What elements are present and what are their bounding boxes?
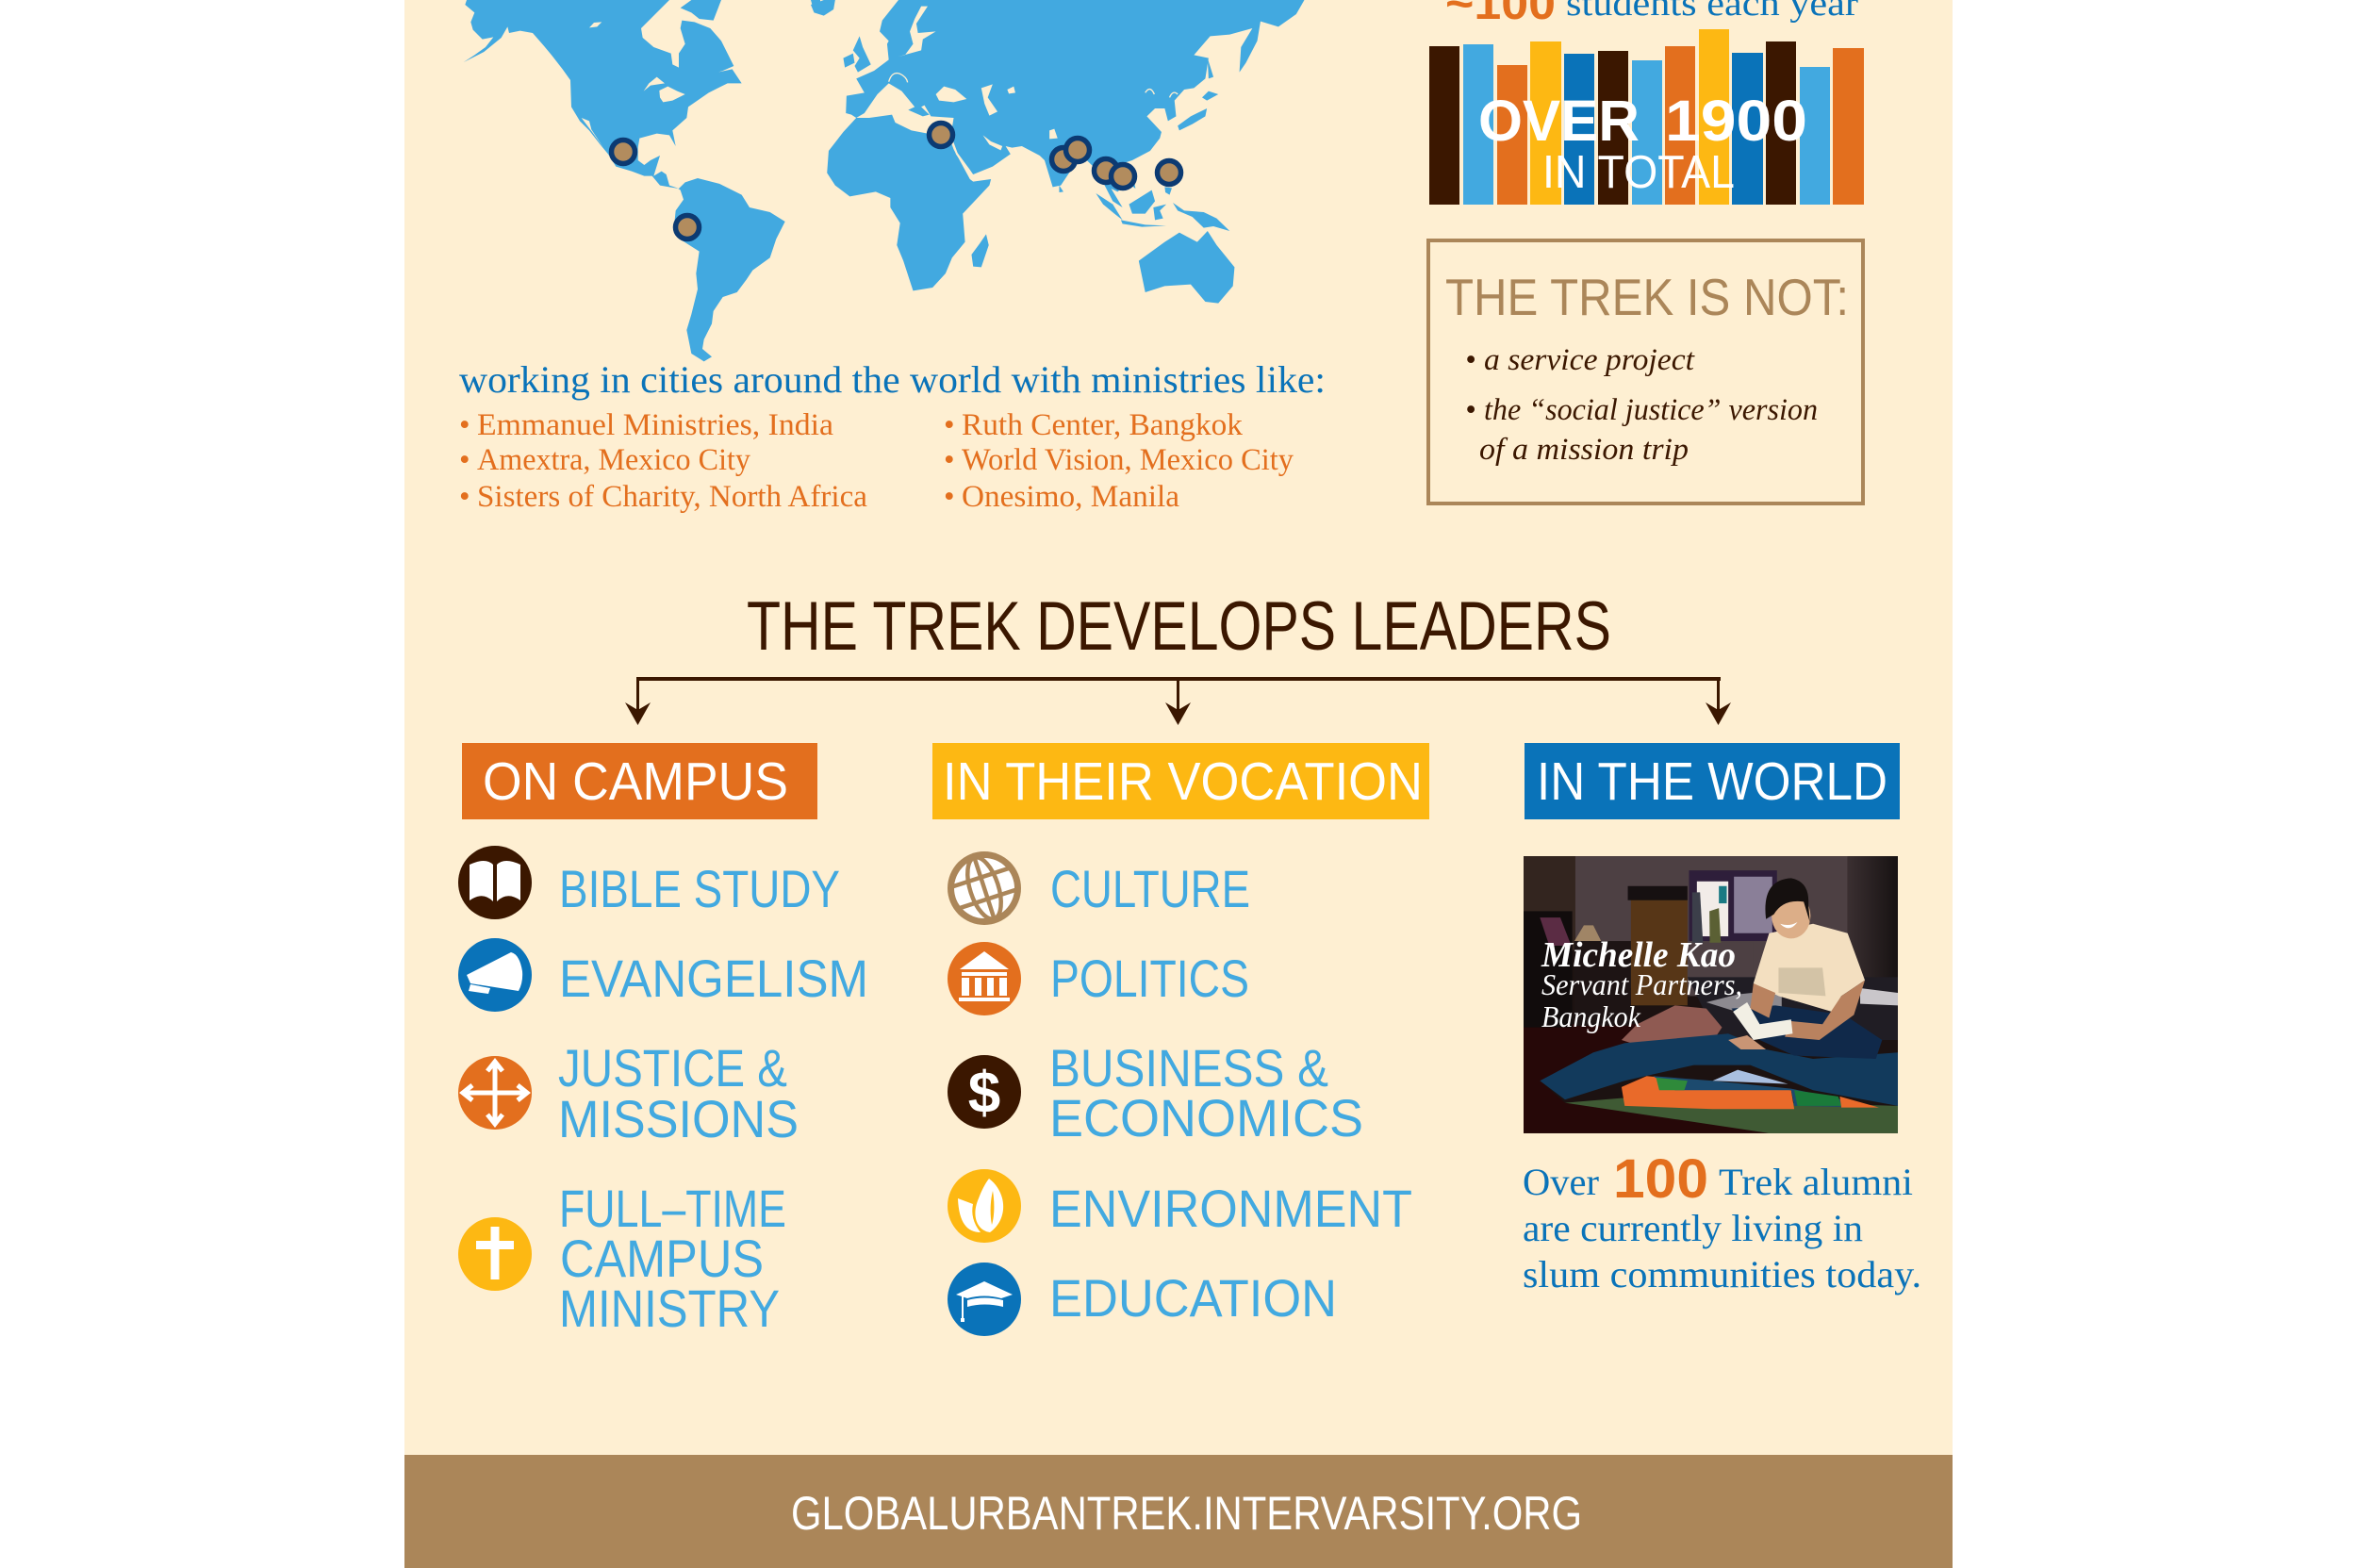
label: business and economics: ECONOMICS (1049, 1088, 1363, 1147)
label: bible study: BIBLE STUDY (559, 859, 840, 918)
panel: the trek is not: • (1465, 393, 1476, 427)
ministries list: • (944, 408, 955, 442)
ministries list: • (459, 443, 470, 477)
label: full-time campus ministry: FULL–TIME (559, 1179, 786, 1238)
photo: Michelle Kao: Servant Partners, (1541, 967, 1742, 1001)
icon: bible (458, 846, 532, 919)
book-spine bar graphic (1429, 29, 1864, 205)
label: full-time campus ministry (559, 1179, 786, 1338)
panel: the trek is not: THE TREK IS NOT: (1445, 268, 1849, 326)
location pins (611, 123, 1180, 239)
label: environment: ENVIRONMENT (1049, 1179, 1412, 1238)
column header: in the world: IN THE WORLD (1537, 751, 1887, 812)
book-spine bar graphic: IN TOTAL (1542, 147, 1735, 198)
label: culture: CULTURE (1050, 859, 1250, 918)
ministries list: Sisters of Charity, North Africa (477, 480, 867, 514)
americas (464, 0, 820, 361)
ministries list: • (944, 443, 955, 477)
icon: leaf (948, 1169, 1021, 1243)
label: education: EDUCATION (1049, 1268, 1337, 1328)
icon: graduation cap (948, 1263, 1021, 1336)
callout: alumni statistic: are currently living in (1523, 1207, 1863, 1249)
label: justice and missions: MISSIONS (558, 1089, 799, 1148)
ministries list: Onesimo, Manila (962, 480, 1179, 514)
label: politics: POLITICS (1050, 949, 1249, 1008)
icon: cross (458, 1217, 532, 1291)
column header: on campus: ON CAMPUS (483, 751, 788, 812)
callout: alumni statistic: slum communities today. (1523, 1253, 1921, 1296)
label: business and economics: BUSINESS & (1049, 1038, 1328, 1098)
africa, eurasia and oceania (811, 0, 1304, 304)
footer band (404, 1455, 1953, 1568)
ministries list: Ruth Center, Bangkok (962, 408, 1243, 442)
panel: the trek is not (1428, 240, 1863, 503)
callout: alumni statistic: Over (1523, 1161, 1599, 1203)
panel: the trek is not: the “social justice” version (1484, 393, 1818, 427)
label: justice and missions (558, 1038, 799, 1148)
label: business and economics (1049, 1038, 1363, 1147)
photo: Michelle Kao: Bangkok (1541, 999, 1641, 1033)
icon: four-way arrows (458, 1056, 532, 1130)
ministries list: • (459, 480, 470, 514)
map caption: working in cities around the world with ministries like: (459, 358, 1326, 401)
branching arrows (625, 677, 1731, 725)
book-spine bar graphic: OVER (1478, 89, 1640, 153)
callout: alumni statistic: Trek alumni (1719, 1161, 1913, 1203)
icon: megaphone (458, 938, 532, 1012)
world map (464, 0, 1304, 361)
ministries list: Emmanuel Ministries, India (477, 408, 833, 442)
book-spine bar graphic: 1900 (1665, 89, 1807, 153)
panel: the trek is not: of a mission trip (1479, 433, 1689, 467)
photo: Michelle Kao: Michelle Kao (1541, 935, 1736, 975)
column header: in their vocation: IN THEIR VOCATION (943, 751, 1423, 812)
ministries list: World Vision, Mexico City (962, 443, 1294, 477)
students each year (1445, 0, 1858, 29)
ministries list: • (944, 480, 955, 514)
ministries list: • (459, 408, 470, 442)
photo: Michelle Kao (1524, 856, 1898, 1133)
icon: government building (948, 942, 1021, 1015)
cream background panel (404, 0, 1953, 1568)
footer band: GLOBALURBANTREK.INTERVARSITY.ORG (791, 1487, 1582, 1540)
icon: dollar sign (948, 1055, 1021, 1129)
icon: globe (946, 849, 1023, 928)
panel: the trek is not: • (1465, 343, 1476, 377)
label: evangelism: EVANGELISM (559, 949, 868, 1008)
label: full-time campus ministry: CAMPUS (560, 1229, 764, 1288)
ministries list: Amextra, Mexico City (477, 443, 750, 477)
callout: alumni statistic (1523, 1148, 1921, 1296)
label: justice and missions: JUSTICE & (558, 1038, 787, 1098)
label: full-time campus ministry: MINISTRY (559, 1279, 780, 1338)
panel: the trek is not: a service project (1484, 343, 1695, 377)
heading: the trek develops leaders: THE TREK DEVELOPS LEADERS (747, 588, 1611, 665)
icon: dollar sign: $ (968, 1061, 1000, 1126)
callout: alumni statistic: 100 (1613, 1148, 1708, 1210)
ministries list (459, 408, 1294, 514)
